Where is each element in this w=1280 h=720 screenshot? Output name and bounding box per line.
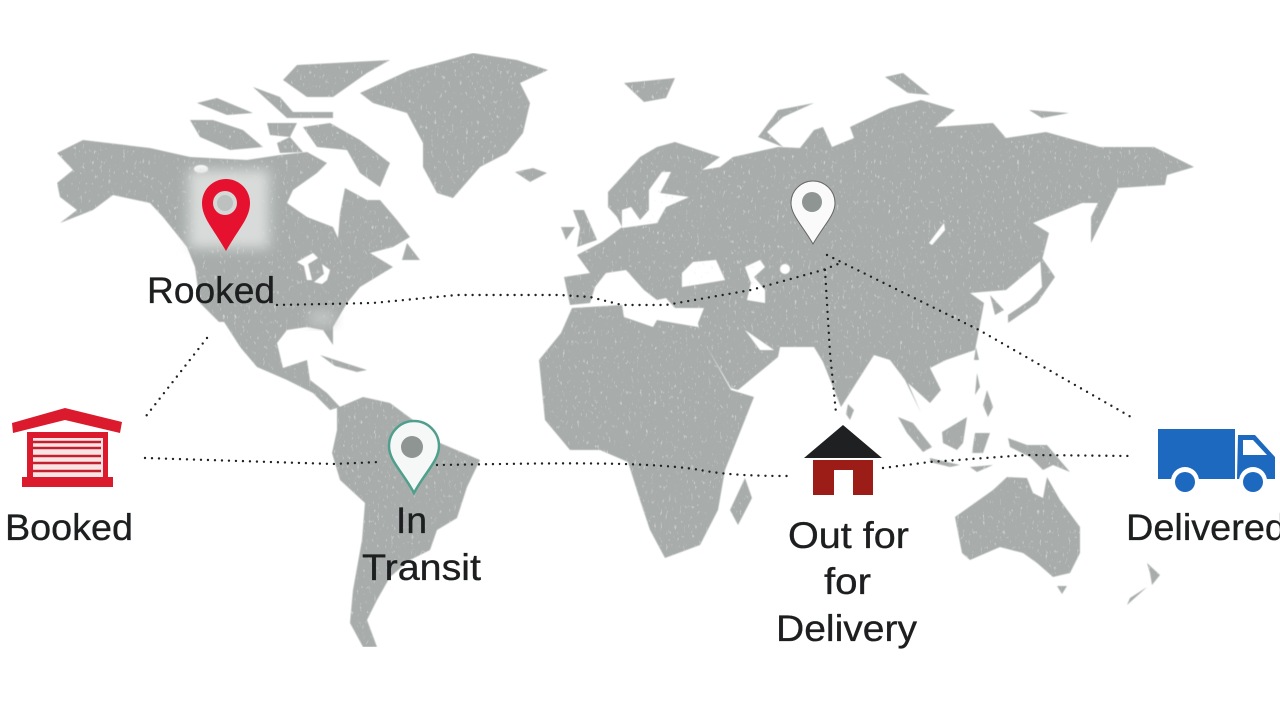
sea: Black Sea <box>682 260 725 287</box>
lakes: Great Lakes <box>297 253 330 284</box>
island: Novaya Zemlya <box>758 103 814 147</box>
lake: Great Bear <box>194 165 208 173</box>
sea: Caspian <box>745 260 765 303</box>
lake: Baikal <box>929 223 945 245</box>
continent: North America <box>57 140 410 410</box>
island: Borneo <box>942 417 967 450</box>
label: Booked: Booked <box>5 507 133 548</box>
islands: Taiwan and Philippines <box>974 347 993 417</box>
island: Sulawesi <box>972 433 990 453</box>
island: Svalbard <box>624 78 675 102</box>
island: Newfoundland <box>402 243 420 260</box>
island: Sri Lanka <box>846 404 854 420</box>
island: Baffin <box>303 123 390 187</box>
world map <box>57 53 1194 647</box>
island: New Siberian <box>1029 110 1069 118</box>
island: Sumatra <box>898 417 932 452</box>
island: New Zealand <box>1127 563 1160 605</box>
lake: Aral <box>780 264 790 274</box>
water cutouts <box>194 165 945 352</box>
highlight glow near Rooked pin <box>189 170 269 248</box>
label: Out for for Delivery: Delivery <box>776 608 918 649</box>
island: Cuba and Caribbean <box>320 355 367 372</box>
highlight glow on east coast <box>310 311 334 325</box>
island: Victoria <box>190 120 263 150</box>
island: Ireland <box>561 227 575 240</box>
island: Iceland <box>515 168 547 182</box>
label: Out for for Delivery: Out for <box>788 515 909 556</box>
island: Britain <box>573 210 597 247</box>
island: Japan <box>1008 255 1055 323</box>
icon: delivery truck <box>1158 429 1275 495</box>
island: Greenland <box>360 53 548 198</box>
continent: Australia <box>955 477 1080 577</box>
continent: Africa <box>539 305 754 558</box>
icon: house <box>804 425 882 495</box>
island: Madagascar <box>730 478 752 525</box>
pin: In Transit (teal) <box>389 421 439 493</box>
label: Rooked: Rooked <box>147 270 275 311</box>
label: In Transit: In <box>396 500 427 541</box>
island: Tasmania <box>1057 586 1067 594</box>
pin: Rooked (red) <box>202 179 250 251</box>
island: Severnaya Zemlya <box>885 73 930 95</box>
label: In Transit <box>362 500 482 588</box>
label: In Transit: Transit <box>362 547 482 588</box>
continent: Eurasia <box>564 100 1194 413</box>
continent: South America <box>332 397 480 647</box>
label: Delivered: Delivered <box>1126 507 1280 548</box>
island: New Guinea <box>1008 438 1070 472</box>
peninsula: Korea <box>990 295 1004 315</box>
islands: Canadian Arctic <box>197 87 333 153</box>
islands: Java and Sunda <box>930 458 993 472</box>
dotted route lines <box>143 255 1132 476</box>
label: Out for for Delivery <box>776 515 918 649</box>
gulf: California <box>218 322 242 352</box>
pin: white waypoint <box>791 181 835 244</box>
island: Ellesmere <box>283 60 390 97</box>
label: Out for for Delivery: for <box>824 561 871 602</box>
sea: Baltic <box>622 172 689 228</box>
icon: warehouse <box>12 408 122 487</box>
gulf: Persian <box>745 330 774 350</box>
